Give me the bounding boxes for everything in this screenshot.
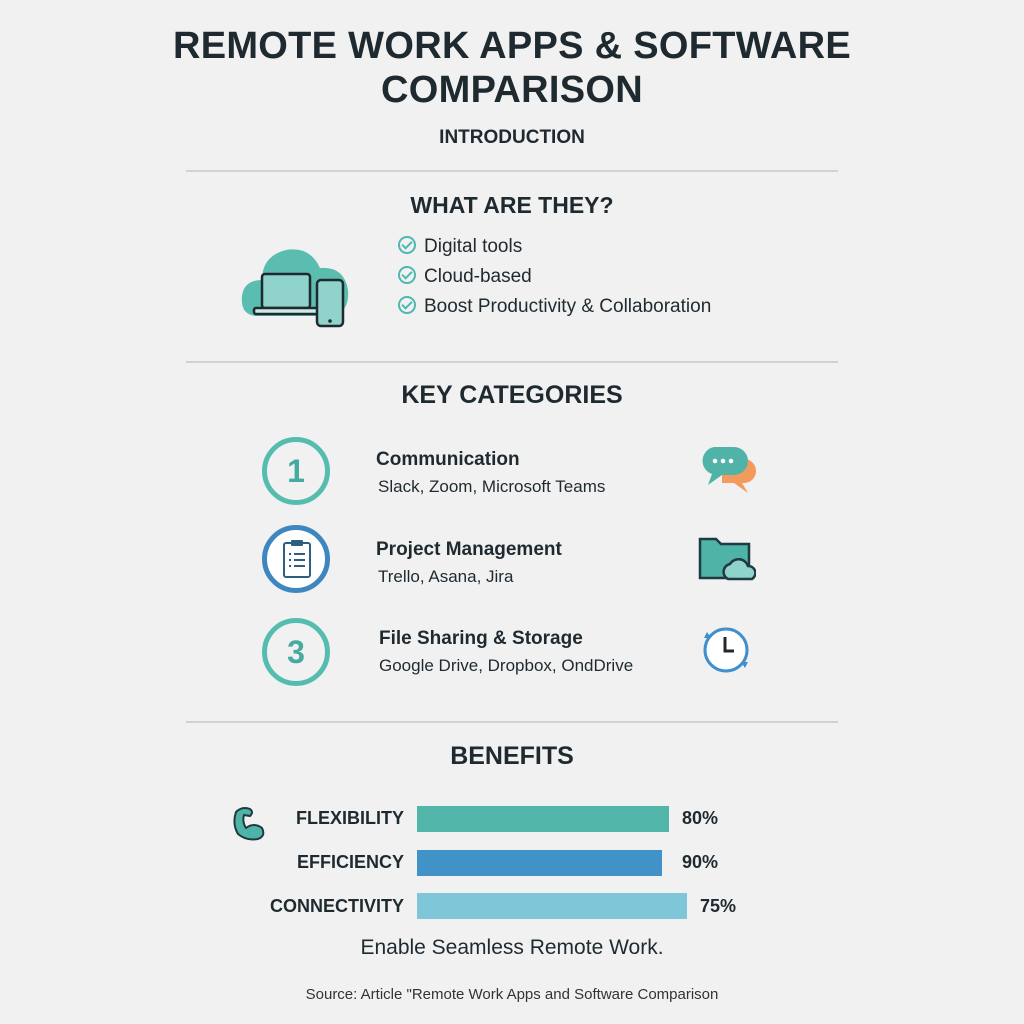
category 1: communication [262,437,756,505]
bar chart [270,806,736,919]
bar chart: 90% [682,852,718,872]
category 1: communication: 1 [287,453,305,489]
title [173,25,851,111]
text: Boost Productivity & Collaboration [424,296,711,317]
category 3: file sharing [262,618,748,686]
icon: folder cloud [698,538,756,580]
title: COMPARISON [381,69,643,111]
heading: benefits: BENEFITS [450,742,574,770]
bar chart: CONNECTIVITY [270,896,404,916]
bar chart: 80% [682,808,718,828]
icon: cloud with devices [242,249,348,328]
icon: bicep [233,807,264,840]
title: REMOTE WORK APPS & SOFTWARE [173,25,851,67]
category 3: file sharing: File Sharing & Storage [379,628,583,649]
category 3: file sharing: 3 [287,634,305,670]
category 3: file sharing: Google Drive, Dropbox, OndDrive [379,656,633,675]
bar chart: 75% [700,896,736,916]
text: Cloud-based [424,266,532,287]
category 2: project management: Project Management [376,539,562,560]
text: Digital tools [424,236,522,257]
tagline: Enable Seamless Remote Work. [360,936,664,959]
bullet list [398,236,711,317]
source: Source: Article "Remote Work Apps and Software Comparison [306,986,718,1003]
category 1: communication: Slack, Zoom, Microsoft Teams [378,477,605,496]
category 2: project management [262,525,756,593]
category 1: communication: Communication [376,449,520,470]
bar chart: FLEXIBILITY [296,808,404,828]
bar chart: EFFICIENCY [297,852,404,872]
heading: key categories: KEY CATEGORIES [401,381,623,409]
category 2: project management: Trello, Asana, Jira [378,567,513,586]
icon: clock [704,628,748,672]
heading: what are they: WHAT ARE THEY? [410,192,614,218]
icon: chat bubbles [702,447,756,493]
subtitle: introduction: INTRODUCTION [439,127,585,148]
